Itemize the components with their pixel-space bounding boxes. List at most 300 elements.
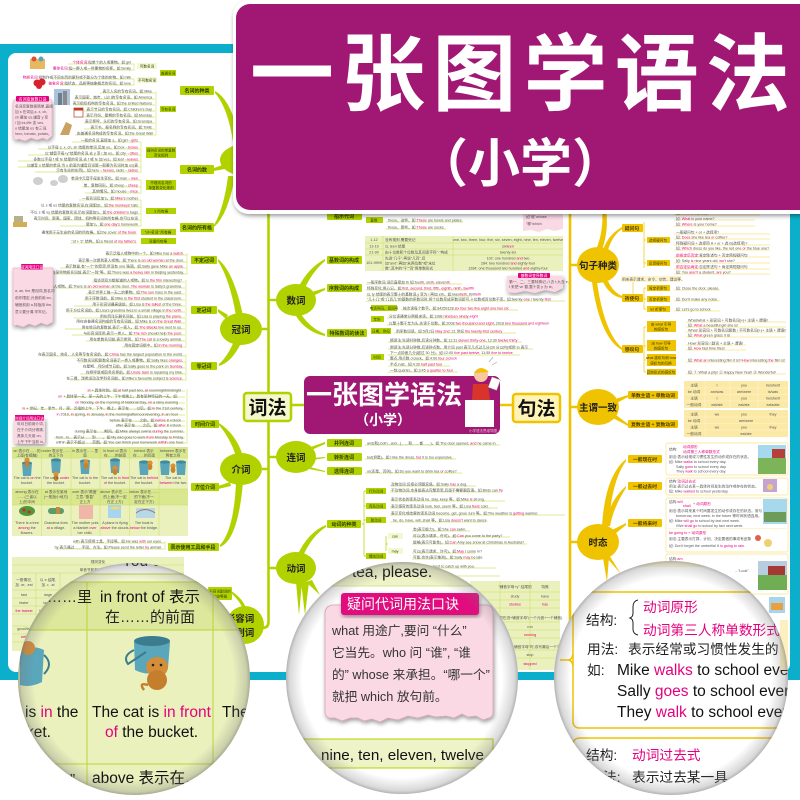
table: cardinal numbers: 21-99 <box>369 250 379 254</box>
pink note: upper: "哪"which <box>526 221 542 226</box>
panel: articles: 与形容词连用,表示一类人。如:The rich should help the poor. <box>83 330 182 336</box>
table: verb forms: "现在进入+辅音字母"时,双写最后一个字母 <box>496 644 565 649</box>
panel: verbs: 可能,也许(表示推测)。如:Sally may be late. <box>413 554 484 560</box>
table: singular: are/were <box>737 390 751 394</box>
center title box <box>304 357 500 434</box>
panel: prepositions: on + 具体某一天、某一天的上午、下午或晚上。具有某种特征的一天。如: <box>58 394 178 398</box>
agreement pills: 单数主语 + 单数动词 <box>631 392 675 399</box>
bubble: 冠词 <box>220 313 262 345</box>
panel: numerals: 一刻,quarter。如:3:45 a quarter to four <box>390 368 454 372</box>
noun pills: 不规则名词的 <box>150 180 172 185</box>
panel: articles: 在称呼语或职务名称前。如:Uncle Sam is repairing my bike. <box>86 370 183 374</box>
box: simple past <box>666 478 788 495</box>
pills: numeral branches: 特殊数词的读法 <box>329 330 365 337</box>
table: singular: 一般动词 <box>687 402 702 407</box>
panel: nouns: 单、复数同形。如:sheep→sheep <box>84 182 138 188</box>
pink note: plural rhyme <box>13 95 53 141</box>
number row: nine, ten, eleven, twelve <box>321 747 484 764</box>
pills: numeral branches: 复数 <box>370 217 378 222</box>
box: simple past: 如: Mike walked to school yesterday. <box>669 488 729 494</box>
box: simple present: They walk to school every day. <box>676 470 726 474</box>
table: plural <box>684 410 788 437</box>
lens 1: prepositions magnified: is in the <box>25 704 78 721</box>
panel: numerals: 特殊变化,用心记。如:first, second, third, fifth, eighth, ninth, twelfth <box>367 286 474 290</box>
panel: nouns: 以"辅音字母+y"结尾的名词,去 y 变 i 加 es。如:city→cities <box>45 150 138 156</box>
verb pills: 连系动词 <box>369 503 384 508</box>
lens 1: prepositions magnified: 在……的前面 <box>105 609 195 626</box>
panel: verbs: 表示状态的连系动词 be, stay, keep 等。如:Mike is strong. <box>391 496 485 502</box>
article pills: 定冠词 <box>196 307 212 314</box>
white sticker square <box>465 400 494 427</box>
pink note: numeral rhyme: 基数词变序数词 <box>521 273 547 278</box>
sentence type pills: 感叹句的互换 <box>650 360 672 366</box>
panel: prepositions: on Monday, on the morning of National Day, on a rainy evening <box>75 400 178 404</box>
table: position prepositions: The cat is <box>165 476 181 480</box>
table: position prepositions: ……(三者以 <box>17 494 37 499</box>
panel: nouns: 以辅音 o 结尾的单词,当 o 前面为辅音且词尾一般要为名词时加 es(表 <box>27 162 138 168</box>
panel: articles: 用于方位名词前。如:Lisa's grandma lives in a small village in the north. <box>66 308 182 312</box>
heading: 词法: 词法 <box>248 397 287 419</box>
lens 3: present tense magnified: 结构: <box>586 748 617 763</box>
table: adjective comparison: large <box>44 593 52 597</box>
table: position prepositions: below 表示在…… <box>129 489 159 494</box>
panel: articles <box>13 250 217 380</box>
verb pills: 行为动词 <box>369 488 384 493</box>
tense box: 动词原形 <box>643 600 698 615</box>
pink note: upper: 如"谁"whose <box>526 214 547 219</box>
table: cardinal numbers: 101-9999 <box>366 261 382 265</box>
pills: numeral branches: 序数词的构成 <box>329 285 359 292</box>
panel: sentence types: 前肯定后否定:肯定陈述句 + 否定简短疑问句 <box>676 252 748 258</box>
table: position prepositions: 上)的中间 <box>19 499 35 504</box>
pink note: plural rhyme: 名词变复数很简单,直接 <box>15 104 53 108</box>
pills: numeral branches: 日期、世纪 <box>372 328 390 333</box>
sentence type pills: 肯定祈使句 <box>649 285 667 290</box>
table: position prepositions: Grandma lives <box>44 521 68 525</box>
panel: nouns: "of + 's" 结构。如:a friend of my father's <box>71 238 136 244</box>
panel: conjunctions <box>327 439 500 475</box>
panel: articles: 用在姓氏的复数前,表示一家人。如:The Blacks live next to us. <box>82 324 182 330</box>
pink note: plural rhyme: 名词变复数口诀 <box>18 95 46 101</box>
pink note: plural rhyme: hero, tomato, potato。 <box>15 132 52 136</box>
heading: 句法 <box>513 394 560 422</box>
table: plural: you <box>741 412 747 416</box>
noun pills: 变化规则 <box>154 152 169 158</box>
noun pills: 双重所有格 <box>149 238 167 243</box>
panel: articles: 用在西洋乐器名词前。如:Lisa is playing the piano. <box>100 314 182 318</box>
table: singular: he/she/it <box>766 384 780 388</box>
table: cardinal numbers: 以 teen 结尾 <box>385 244 406 248</box>
table: position prepositions: There is a tree <box>15 521 39 525</box>
box: simple present <box>666 443 788 475</box>
lens 2: rhyme note magnified: tea, please. <box>352 564 432 581</box>
article pills: 不定冠词 <box>194 257 214 264</box>
panel: sentence types: 如: Sally is nine years old, isn't she? <box>676 258 735 263</box>
panel: nouns: 集体名词:指一群人或一些事物的名称。如:family <box>53 66 131 70</box>
sentence type pills: 其他形式的感叹句 <box>647 369 676 374</box>
box: simple past: 结构:动词过去式 <box>669 478 696 484</box>
table: cardinal numbers: twenty-six <box>500 250 516 254</box>
tense box: 动词第三人称单数形式 <box>643 622 780 638</box>
pink note: preposition rhyme: 上午下午当前 in。 <box>17 439 47 444</box>
panel: articles: 用在单数名词前,表示类别。如:The cat is a lovely animal. <box>90 336 182 342</box>
panel: sentence types: 如: What a beautiful girl she is! <box>688 322 738 328</box>
pink note: plural rhyme: i 加 es,f/fe 变 ves, <box>15 120 44 125</box>
panel: numerals: 分位读通常分两组来读。如:1998 nineteen ninety-eight <box>389 314 478 318</box>
table: position prepositions: The cat is in front <box>101 476 129 480</box>
noun pills: 专有名词 <box>161 106 176 111</box>
lens 3: present tense magnified: 法: <box>603 770 620 785</box>
table: adjective comparison: 规则变化 <box>91 559 106 564</box>
table: verb forms: studies <box>509 602 521 606</box>
agreement pills: 复数主语 + 复数动词 <box>631 421 675 428</box>
table: plural: 一般动词 <box>687 431 702 436</box>
panel: prepositions: after 表示在……之后。如:after 8 o'clock <box>116 422 181 428</box>
bubble: 数词: 数词 <box>286 295 306 307</box>
preposition pills: 方位介词 <box>195 484 215 491</box>
article pills: 零冠词 <box>196 363 212 370</box>
panel: nouns: 表示月份、星期的专有名词。如:Monday <box>86 112 152 118</box>
table: singular: eat/ate <box>711 403 723 407</box>
panel: nouns: 表示组织机构的专有名词。如:the United Nations <box>73 100 152 106</box>
lens 1: prepositions magnified: ……里 <box>47 589 92 606</box>
table: adjective comparison: fast <box>21 593 27 597</box>
panel: subject-verb agreement <box>628 381 788 437</box>
table: cardinal numbers: 由十位数和个位数及其间连字符"-"构成 <box>385 250 448 254</box>
panel: nouns: 不以 s 或 es 结尾的复数名词,仍在词尾加's。如:the children's bags <box>30 210 138 214</box>
lens 1: prepositions magnified: above 表示在…… <box>92 769 216 787</box>
pink note: preposition rhyme: 年月日前用介词, <box>17 421 44 426</box>
panel: numerals <box>327 212 569 372</box>
box: present continuous <box>666 554 788 670</box>
icon: bucket with cat, center <box>126 636 170 690</box>
panel: sentence types: 如: What green grass it is! <box>688 332 730 338</box>
panel: numerals: 下一点钟差几分(超过 30 分)。如:12:05 five past twelve, 11:55 five to twelve <box>390 350 513 355</box>
panel: nouns: 一般名词后加's。如:Mike's mother <box>82 196 139 200</box>
bubble: 句子种类 <box>577 247 619 283</box>
panel: sentence types: 如: How fast time flies! <box>688 346 725 350</box>
panel: prepositions: with 表示使用工具、手段等。如:He was with our eyes. <box>73 538 162 544</box>
table: position prepositions: of the bucket. <box>104 481 126 485</box>
panel: nouns: 表示书、报名称的专有名词。如:TIME <box>91 124 153 130</box>
box: simple present: 动词第三人称单数形式 <box>683 449 720 454</box>
pills: numeral branches: 指示代词 <box>334 213 354 220</box>
pink note body: 就把 which 放句前。 <box>332 689 448 704</box>
table: position prepositions: at 表示在某地 <box>45 489 68 494</box>
table: singular: 主语 <box>690 382 698 388</box>
table: verb forms: has <box>542 602 548 606</box>
panel: articles: 用在固定词组中。如:in the morning <box>124 342 182 348</box>
panel: nouns: 尾加's。如:one day's homework <box>86 222 138 226</box>
table: position prepositions: 面 <box>83 452 87 458</box>
noun pills: 名词的所有格 <box>182 224 212 231</box>
box: simple future: 结构:will <box>669 499 683 504</box>
lens 1: prepositions magnified <box>18 553 250 795</box>
bubble: 冠词: 冠词 <box>231 324 251 336</box>
panel: verbs: 表示感官的连系动词 look, feel, seem 等。如:Lisa feels cold. <box>391 504 489 508</box>
table: position prepositions: The boat is <box>135 521 153 525</box>
tense box: 用法: <box>587 642 618 657</box>
table: cardinal numbers: 数",其中的"千""百"用单数形式 <box>385 266 433 270</box>
tense box: They walk to school every <box>617 704 796 721</box>
panel: verbs: 如:I shall do it myself. <box>413 572 448 576</box>
lens 1: prepositions magnified: ” <box>70 772 75 789</box>
table: plural: they <box>770 426 777 430</box>
panel: nouns: 物质名词:指制作成不同东西的原料或不能分为个体的实物。如:milk <box>23 74 131 80</box>
table: singular: eat/ate <box>738 403 750 407</box>
panel: sentence types: 如: You aren't a student, are you? <box>676 270 731 274</box>
panel: verbs: 可以(表示请求、许可)。如:May I come in? <box>413 548 482 554</box>
panel: nouns: 其他情况。如:mouse→mice <box>92 188 138 194</box>
pink note: article rhyme <box>13 264 55 327</box>
box: simple present: 如: Mike walks to school every day. <box>669 459 726 464</box>
sentence type pills: let 祈使句 <box>650 306 666 311</box>
icon: wall <box>60 122 72 135</box>
table: adjective comparison: larger <box>43 601 53 605</box>
bubble: 句子种类: 句子种类 <box>579 260 617 272</box>
panel: prepositions: in + 世纪、年、季节、月、周、泛指的上午、下午、晚上。表示在……以后。如:in the 21st century, <box>22 406 183 410</box>
panel: sentence types: 如: What is your name? <box>676 216 715 221</box>
pills: numeral branches <box>327 212 399 360</box>
panel: sentence types: 前否定后肯定:否定陈述句 + 肯定简短疑问句 <box>676 264 748 269</box>
lens 1: prepositions magnified: ket. <box>26 724 51 741</box>
box: simple future: 用法:表示将来某个时间要发生的动作或存在的状态。常与 <box>669 508 763 513</box>
table: position prepositions: above 表示在…… <box>100 489 130 494</box>
panel: articles: 表示世界上独一无二的事物。如:The sun rises in the east. <box>88 290 182 294</box>
center title box: 小学语法思维导图 <box>469 428 497 433</box>
lens 3: present tense magnified: 动词过去式 <box>632 748 701 763</box>
table: singular: 主语 <box>690 396 698 400</box>
bubble: 形容词和副词: 和副词 <box>226 627 254 639</box>
table: position prepositions: between the two <box>160 481 186 485</box>
panel: sentence types: 一般疑问句 + or + 选择项? <box>676 230 719 234</box>
panel: sentence types: 如: Don't make any noise. <box>676 296 718 302</box>
panel: numerals: these。这些。如:These are bowls and plates. <box>388 218 463 222</box>
bubble: 动词: 动词 <box>286 563 306 575</box>
panel: prepositions: during 表示在……期间。如:Mike always swims during the summer. <box>75 428 184 434</box>
subtitle: （小学） <box>416 136 624 194</box>
noun pills: 不可数名词 <box>138 77 156 82</box>
table: position prepositions: above the clouds. <box>101 526 129 530</box>
tense box: Sally goes to school every <box>617 683 797 700</box>
table: position prepositions: The mother puts <box>72 521 99 525</box>
panel: articles: 表示第一次提到某人或物。如:There is an old woman at the door. <box>78 258 184 262</box>
table: adjective comparison: faster <box>19 601 29 605</box>
panel: sentence types: What/what + 形容词 + 可数名词(+)+ 主语 + 谓语!! <box>688 318 768 322</box>
pink note: plural rhyme: sh 要加 es,辅音 y 变 <box>15 114 49 120</box>
table: singular: is/was <box>768 390 778 394</box>
table: adjective comparison <box>12 557 232 651</box>
panel: articles: 表示数量,有"一个"的意思,但没有 one 强调。如:Sally gave Mike an apple. <box>65 264 184 268</box>
bubble: 形容词和副词 <box>226 606 264 644</box>
panel: articles: 在三餐、球类运动及学科名词前。如:Mike's favourite subject is science. <box>66 376 183 380</box>
agreement pills <box>628 391 678 428</box>
tense box: 结构: <box>586 613 617 628</box>
table: cardinal numbers: sixteen <box>502 244 514 248</box>
panel: nouns: 表示时间、距离、国家、团体、机构等名词的所有格,也可以在词 <box>34 216 138 220</box>
table: position prepositions: 正上方 <box>79 499 91 504</box>
table: position prepositions: below the bridge. <box>130 526 158 530</box>
table: verb forms <box>470 581 565 670</box>
panel: prepositions: before 表示在……之前。如:before 8 o'clock <box>110 418 181 422</box>
tense box: 表示经常或习惯性发生的 <box>628 641 779 657</box>
table: position prepositions: under 表示在…… <box>42 448 71 453</box>
preposition pills <box>168 420 219 551</box>
branches: yellow curves <box>592 210 628 582</box>
table: adjective comparison: 加 -r, -st <box>41 582 55 587</box>
pink note: numeral rhyme: 第一、二、三要特殊记,八去 t,九去 e, <box>509 279 569 284</box>
panel: conjunctions: or(还是、否则)。如:Do you want to drink tea or coffee? <box>367 468 457 474</box>
panel: conjunctions: and(和),both...and...(……和……都……)。如:The door opened, and he came in. <box>367 440 497 446</box>
table: adjective comparison: the fastest <box>15 609 33 613</box>
noun pills: 普通名词 <box>161 70 176 75</box>
panel: sentence types: 用来表示请求、命令、劝告、建议等。 <box>622 276 685 282</box>
panel: prepositions: from...to... 表示从……到……。如:My dad goes to work from Monday to Friday. <box>56 434 184 440</box>
box: simple future: 如: Don't forget the umbrella! It is going to rain. <box>669 543 745 548</box>
tense pills: 一般将来时 <box>633 520 657 527</box>
table: position prepositions: bucket. <box>79 481 91 485</box>
table: verb forms: stop <box>527 653 533 657</box>
box: simple present: Sally goes to school every day. <box>676 465 727 469</box>
panel: sentence types: 如: Does she like tea or coffee? <box>676 234 727 240</box>
panel: prepositions: within 表示不超过……范围。如:You can finish your homework within one hour. <box>56 440 184 444</box>
icon: sheep <box>33 175 68 186</box>
table: position prepositions <box>12 447 188 536</box>
table: cardinal numbers: 先说"几千",再说"几百",后 <box>385 256 426 260</box>
panel: prepositions: by 表示通过……手段、方法。如:Please send the letter by airmail. <box>55 544 162 550</box>
pink note: article rhyme: 前作限定,元音前用 an, <box>15 295 52 300</box>
preposition pills: 表示使用工具和手段 <box>170 544 216 551</box>
table: adjective comparison: 加 -er, -est <box>15 582 33 587</box>
box: simple future: 用法:主要表示打算、计划、决定要做的事或有迹象 <box>669 536 751 541</box>
pink note body: 的” whose 来承担。“哪一个” <box>332 667 490 682</box>
bubble: 介词 <box>220 453 262 485</box>
table: cardinal numbers: 没有规则,需要死记 <box>385 237 416 242</box>
right trunk: syntax <box>500 205 578 660</box>
panel: prepositions <box>12 388 219 551</box>
panel: numerals: 半点,half。如:4:30 half past four <box>390 362 443 366</box>
table: adjective comparison: well <box>21 635 27 639</box>
table: plural: they <box>770 412 777 416</box>
panel: verbs: 可以(表示请求、许可)。如:Can you come to the party? <box>413 533 502 538</box>
panel: nouns: 表示称呼、头衔的专有名词。如:Grandpa <box>85 118 153 124</box>
panel: nouns: 多数以字母 f 或 fe 结尾的名词,去 f 或 fe 加 ves。如:leaf→leaves <box>33 156 138 162</box>
table: position prepositions: 上面(有接触) <box>17 452 37 458</box>
icon: calendar <box>74 108 83 117</box>
table: verb forms: 特殊 <box>541 584 549 589</box>
panel: sentence types: 如: ① What a pity! ② Happy New Year! ③ Wonderful! <box>688 370 776 374</box>
tense pills: 一般现在时 <box>633 456 657 463</box>
tense box: Mike walks to school every <box>617 662 800 679</box>
table: plural: you <box>741 426 747 430</box>
teal background frame <box>0 44 800 680</box>
table: cardinal numbers: 102: one hundred and two <box>487 256 529 260</box>
table: cardinal numbers: 1-12 <box>370 238 378 242</box>
sentence type pills: 的感叹句 <box>654 326 669 332</box>
pink note: numeral rhyme <box>507 273 569 293</box>
panel: nouns: 以 s 或 es 结尾的复数名词,在词尾加'。如:the monkeys' tails <box>41 202 138 208</box>
table: plural: be 动词 <box>688 418 701 423</box>
panel: numerals: 顺读法:先读时钟数,后读分钟数。如:11:31 eleven thirty-one, 12:30 twelve thirty <box>390 338 518 342</box>
table: plural: eat/ate <box>740 432 752 436</box>
table: plural: 主语 <box>690 412 698 416</box>
noun pills <box>137 63 214 244</box>
bubble: 连词: 连词 <box>286 452 306 464</box>
bubble: 名词 <box>220 143 280 177</box>
table: singular: you <box>741 396 747 400</box>
table: position prepositions: the bucket. <box>135 481 153 485</box>
bubble: 名词: 名词 <box>240 155 260 167</box>
panel: numerals: "几十几"或"几百几"的基数的序数词时,将个位数变成序数词即可,十位数或百位数不变。如:twenty-one / twenty-first <box>367 296 551 302</box>
pink note: preposition rhyme: 在于介词分得清, <box>17 427 44 432</box>
panel: verbs: 及物动词,后接必须跟宾语。如:Sally has a dog. <box>391 482 467 486</box>
pills: numeral branches: 电话号码、房间号 <box>370 305 399 310</box>
panel: prepositions: at + 具体时刻。如:at half past two, at noon/night/midnight <box>87 388 181 392</box>
verb pills: 情态动词 <box>369 553 384 558</box>
icon: hearts <box>34 78 46 89</box>
table: position prepositions: The cat is under <box>43 476 70 480</box>
verb pills: 动词的种类 <box>331 521 357 528</box>
table: position prepositions: The cat is on the <box>13 476 41 480</box>
panel: sentence types: 如: Who is that boy? <box>676 210 709 216</box>
bubble: 介词: 介词 <box>231 464 251 476</box>
table: adjective comparison: 一般情况, <box>16 577 32 582</box>
sentence type pills: what 感叹句和 how <box>646 355 677 360</box>
table: cardinal numbers: one, two, three, four, five, six, seven, eight, nine, ten, eleven, twelve <box>453 238 563 242</box>
bubble: 主谓一致: 主谓一致 <box>579 402 617 414</box>
table: position prepositions: her child. <box>78 531 92 535</box>
panel: numerals: 以整十整千年为头,先读千位数。如:2008 two thousand and eight, 2018 two thousand and eighteen <box>389 320 549 326</box>
table: position prepositions: on 表示在……的 <box>13 448 41 453</box>
panel: articles: 用于形容词最高级前。如:Lisa is the tallest of the three. <box>92 302 182 306</box>
pink note body: what 用途广,要问 “什么” <box>331 623 467 638</box>
icon: city <box>54 89 70 105</box>
panel: articles: 指上文提到的人或物。如:There is an old woman at the door. The woman is Sally's grandma. <box>32 284 182 288</box>
pink note body <box>325 605 493 722</box>
panel: sentence types: 如: Where is your home? <box>676 222 717 226</box>
noun pills: 名词的种类 <box>184 87 210 94</box>
sentence type pills: 反意疑问句 <box>649 260 667 265</box>
table: singular: I <box>716 384 718 388</box>
panel: sentence types: 特殊疑问词 + 选择项 A + or + 选 B(选择项)? <box>676 240 747 246</box>
branches: green curves <box>214 91 326 615</box>
heading: 句法: 句法 <box>517 398 556 420</box>
box: simple present: 结构: <box>669 446 677 452</box>
table: position prepositions: flowers. <box>21 531 33 535</box>
table: position prepositions: bucket. <box>21 481 33 485</box>
pills: numeral branches: 基数词的构成 <box>329 257 359 264</box>
tense pills: 一般过去时 <box>633 483 657 490</box>
box: simple future <box>666 498 788 552</box>
table: plural: 主语 <box>690 424 698 430</box>
conjunction pills: 并列连词 <box>334 440 354 447</box>
table: verb forms: have <box>541 594 549 598</box>
table: position prepositions: 的下面(不一 <box>134 494 154 499</box>
panel: numerals: those。那些。如:Those are socks. <box>388 224 445 230</box>
sentence type pills: 由 how 引导 <box>651 340 671 346</box>
table: plural: we <box>715 426 719 430</box>
panel: numerals: 一般序数词,词后直接加 th 如:fourth, sixth, eleventh <box>367 280 450 284</box>
bubble: 连词 <box>276 441 316 473</box>
sentence type pills: 选择疑问句 <box>649 237 667 242</box>
table: cardinal numbers <box>365 236 563 271</box>
noun pills: "of+名词" 所有格 <box>145 229 172 234</box>
table: position prepositions: 定在正下方) <box>134 499 154 504</box>
pills: numeral branches: 时间 <box>373 354 381 359</box>
table: cardinal numbers: 加"and",再加"末两位数"或"末位 <box>385 260 436 266</box>
bubble: 主谓一致 <box>577 389 619 425</box>
table: position prepositions: among the <box>18 526 36 530</box>
